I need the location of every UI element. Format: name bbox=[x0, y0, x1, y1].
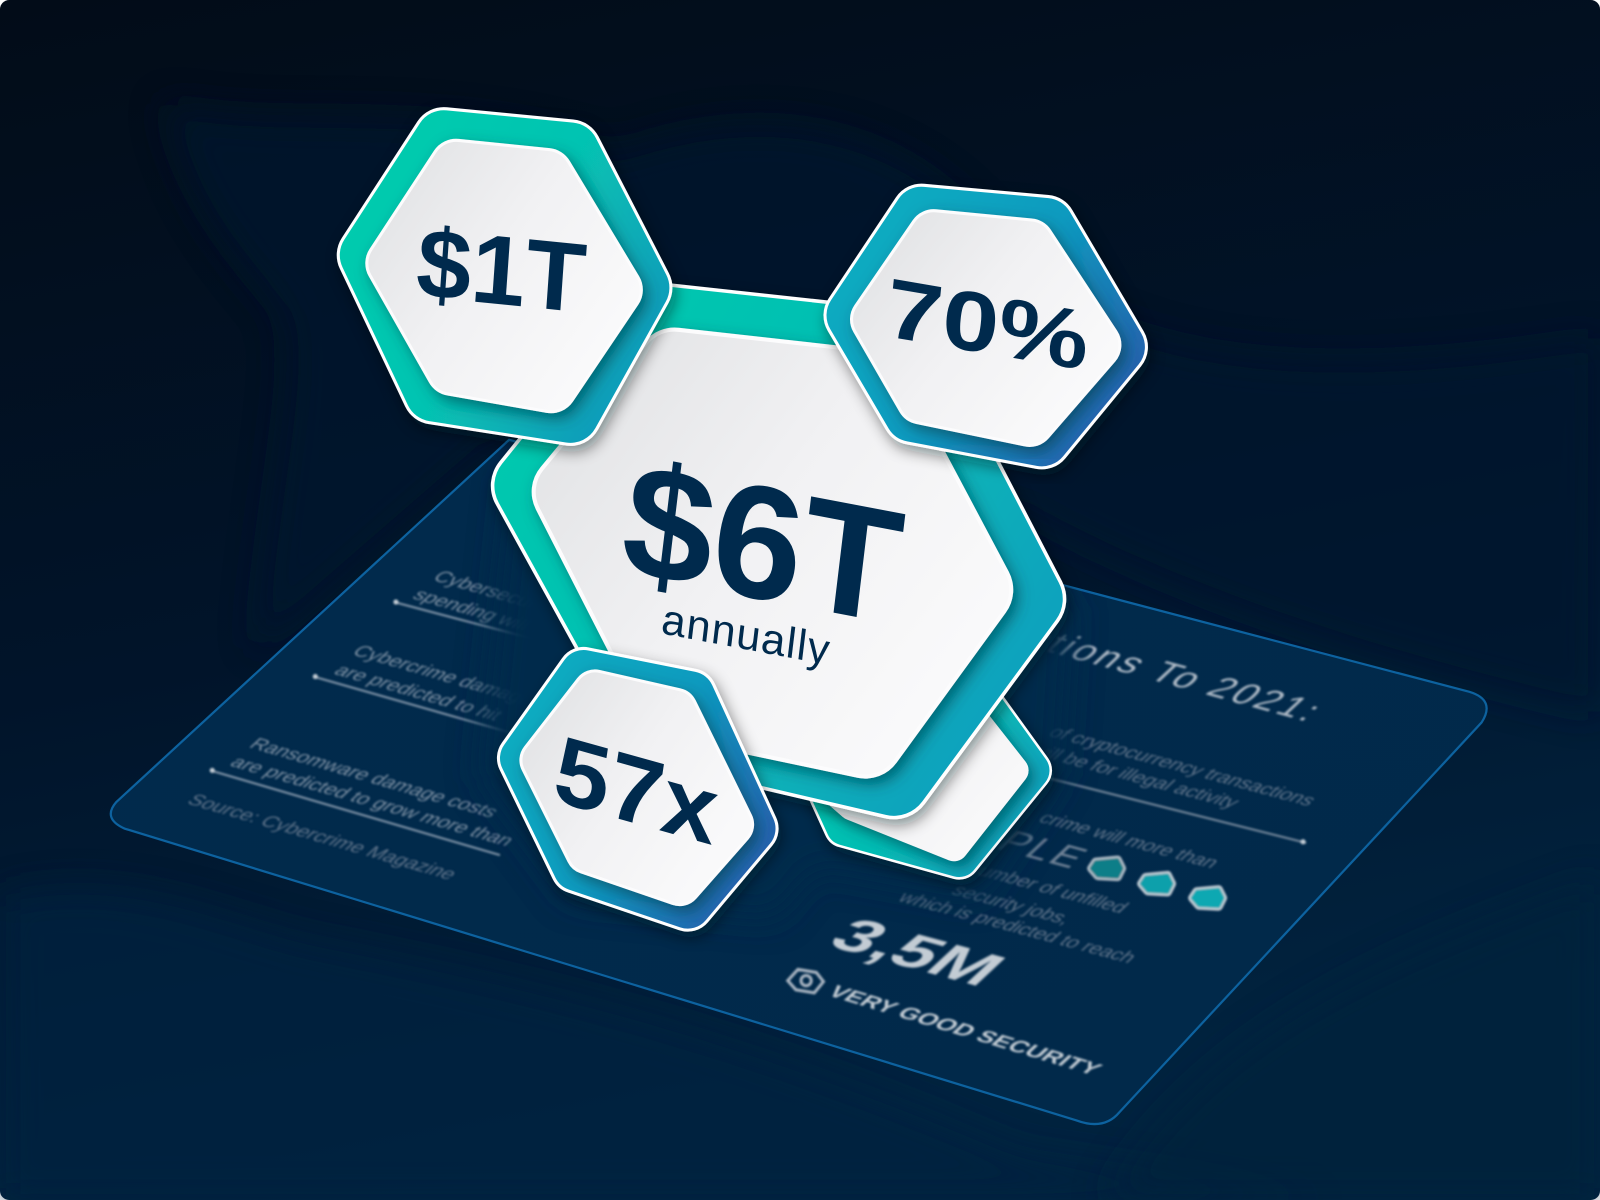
value: $1T: $1T bbox=[413, 207, 589, 333]
value: $6T: $6T bbox=[614, 429, 911, 659]
left column text: are predicted to grow more than bbox=[225, 754, 519, 850]
panel: skewed infographic page bbox=[111, 296, 1487, 1124]
right column text bbox=[788, 595, 1334, 1079]
left column text: Ransomware damage costs bbox=[244, 735, 503, 821]
label: annually: annually bbox=[659, 596, 832, 675]
left column text: Source: Cybercrime Magazine bbox=[182, 791, 462, 883]
right column text: number of unfilled bbox=[961, 860, 1133, 917]
panel text content bbox=[182, 568, 1334, 1079]
right column text: VERY GOOD SECURITY bbox=[823, 982, 1107, 1079]
left column text bbox=[182, 568, 604, 883]
hexagon: $6T annually bbox=[530, 321, 1028, 781]
right column text: security jobs, bbox=[946, 882, 1077, 928]
hexagon: 57x bbox=[523, 673, 752, 905]
value: 57x: 57x bbox=[548, 716, 725, 866]
value: 70%: 70% bbox=[882, 261, 1093, 388]
right column text: will be for illegal activity bbox=[1024, 741, 1245, 812]
right column text: 3,5M bbox=[816, 909, 1018, 996]
hexagon: 70% bbox=[854, 214, 1117, 439]
right column text: PEOPLE bbox=[900, 801, 1098, 876]
left column text: Cybercrime damage bbox=[347, 643, 540, 709]
right column text: of cryptocurrency transactions bbox=[1043, 724, 1321, 810]
icons: three small hexagons bbox=[1092, 860, 1222, 906]
hexagon: $1T bbox=[368, 139, 641, 414]
icon: shield logo bbox=[788, 969, 823, 993]
left column text: spending will exceed bbox=[408, 586, 604, 654]
left column text: Cybersecurity bbox=[428, 568, 565, 618]
hexagon: back card bbox=[829, 686, 1031, 858]
right column text: Predictions To 2021: bbox=[917, 595, 1334, 728]
right column text: crime will more than bbox=[1033, 810, 1224, 872]
right column text: which is predicted to reach bbox=[892, 889, 1141, 967]
left column text: are predicted to hit bbox=[329, 662, 508, 724]
